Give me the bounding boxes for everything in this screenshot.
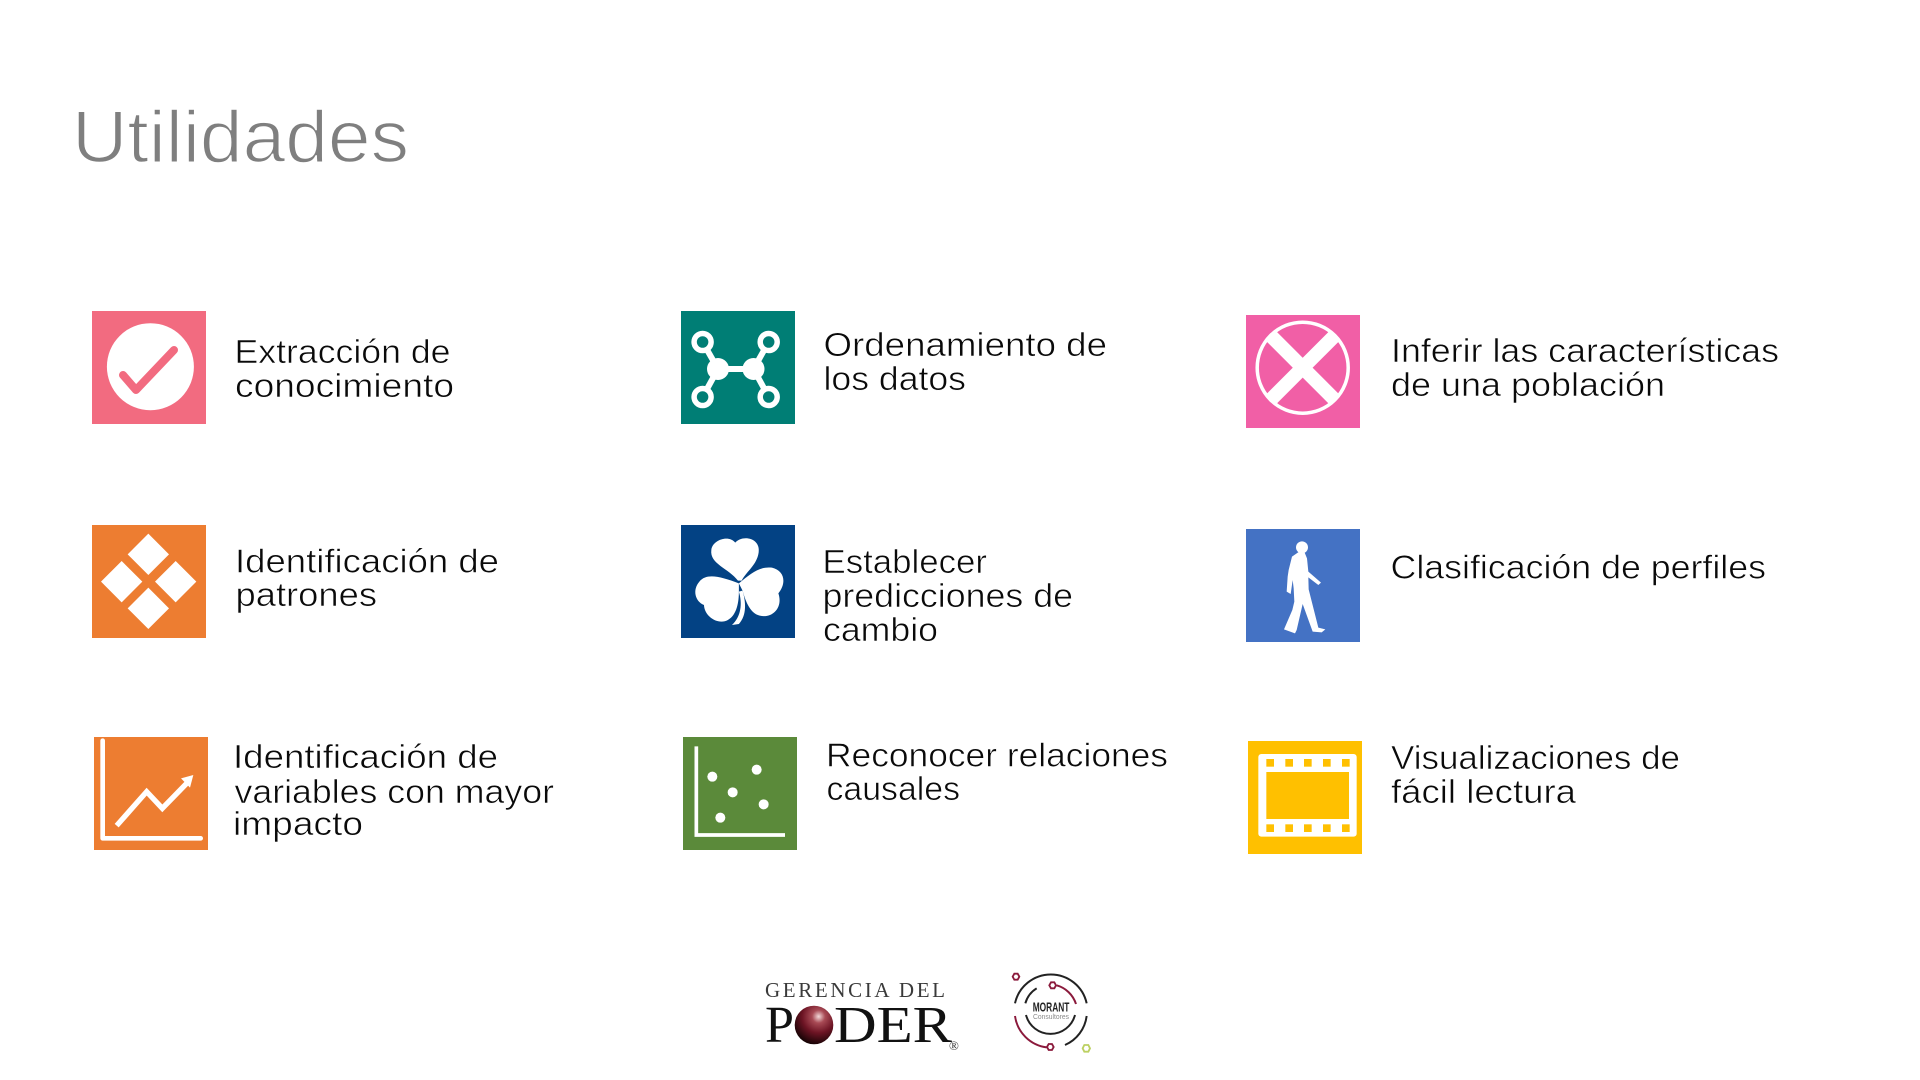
label: Identificación de (233, 739, 498, 776)
label: Extracción de (234, 334, 450, 371)
label (822, 544, 1073, 649)
label (1391, 740, 1680, 811)
label (235, 544, 499, 614)
item: Visualizaciones de fácil lectura (1248, 740, 1680, 854)
item: Reconocer relaciones causales (683, 737, 1168, 850)
label: Visualizaciones de (1391, 740, 1680, 777)
item: Clasificación de perfiles (1246, 529, 1766, 642)
logo: Gerencia del Poder (765, 978, 959, 1054)
item: Inferir las características (1246, 315, 1779, 428)
label (826, 738, 1168, 808)
label: predicciones de (822, 578, 1073, 615)
label: causales (826, 771, 960, 808)
icon: check mark (92, 311, 206, 424)
icon: crossed circle (1246, 315, 1360, 428)
label (233, 739, 554, 843)
icon: scatter plot (683, 737, 797, 850)
label: los datos (824, 361, 966, 398)
label: Reconocer relaciones (826, 738, 1168, 774)
label: conocimiento (235, 368, 454, 405)
icon: rising line chart (94, 737, 208, 850)
label: impacto (233, 806, 363, 843)
icon: walking person (1246, 529, 1360, 642)
item: Extracción de conocimiento (92, 311, 454, 424)
logo: Gerencia del Poder: P (765, 997, 794, 1054)
label: Inferir las características (1391, 333, 1779, 370)
label (824, 327, 1107, 398)
logo: Morant Consultores (1013, 974, 1090, 1052)
label (1391, 333, 1779, 404)
label (234, 334, 454, 405)
label: fácil lectura (1391, 774, 1576, 811)
label: Clasificación de perfiles (1390, 550, 1766, 586)
icon: four diamonds (92, 525, 206, 638)
item: Establecer predicciones de cambio (681, 525, 1073, 649)
logo: Gerencia del Poder: DER (834, 997, 952, 1054)
item: Identificación de patrones (92, 525, 499, 638)
item: Ordenamiento de los datos (681, 311, 1107, 424)
label: variables con mayor (234, 774, 554, 811)
item: Identificación de variables con mayor impacto (94, 737, 554, 850)
icon: shamrock (681, 525, 795, 638)
logo: Gerencia del Poder: ® (949, 1038, 959, 1053)
logo: Gerencia del Poder: GERENCIA DEL (765, 978, 945, 1002)
label: cambio (823, 612, 938, 649)
label: de una población (1391, 367, 1665, 404)
label: Establecer (822, 544, 987, 581)
logo: Morant Consultores: MORANT (1033, 1000, 1069, 1015)
label: Identificación de (235, 544, 499, 580)
title: Utilidades (72, 97, 409, 178)
icon: film strip (1248, 741, 1362, 854)
label: Ordenamiento de (824, 327, 1107, 364)
icon: network nodes (681, 311, 795, 424)
label: patrones (236, 577, 377, 614)
logo: Morant Consultores: Consultores (1033, 1014, 1069, 1021)
